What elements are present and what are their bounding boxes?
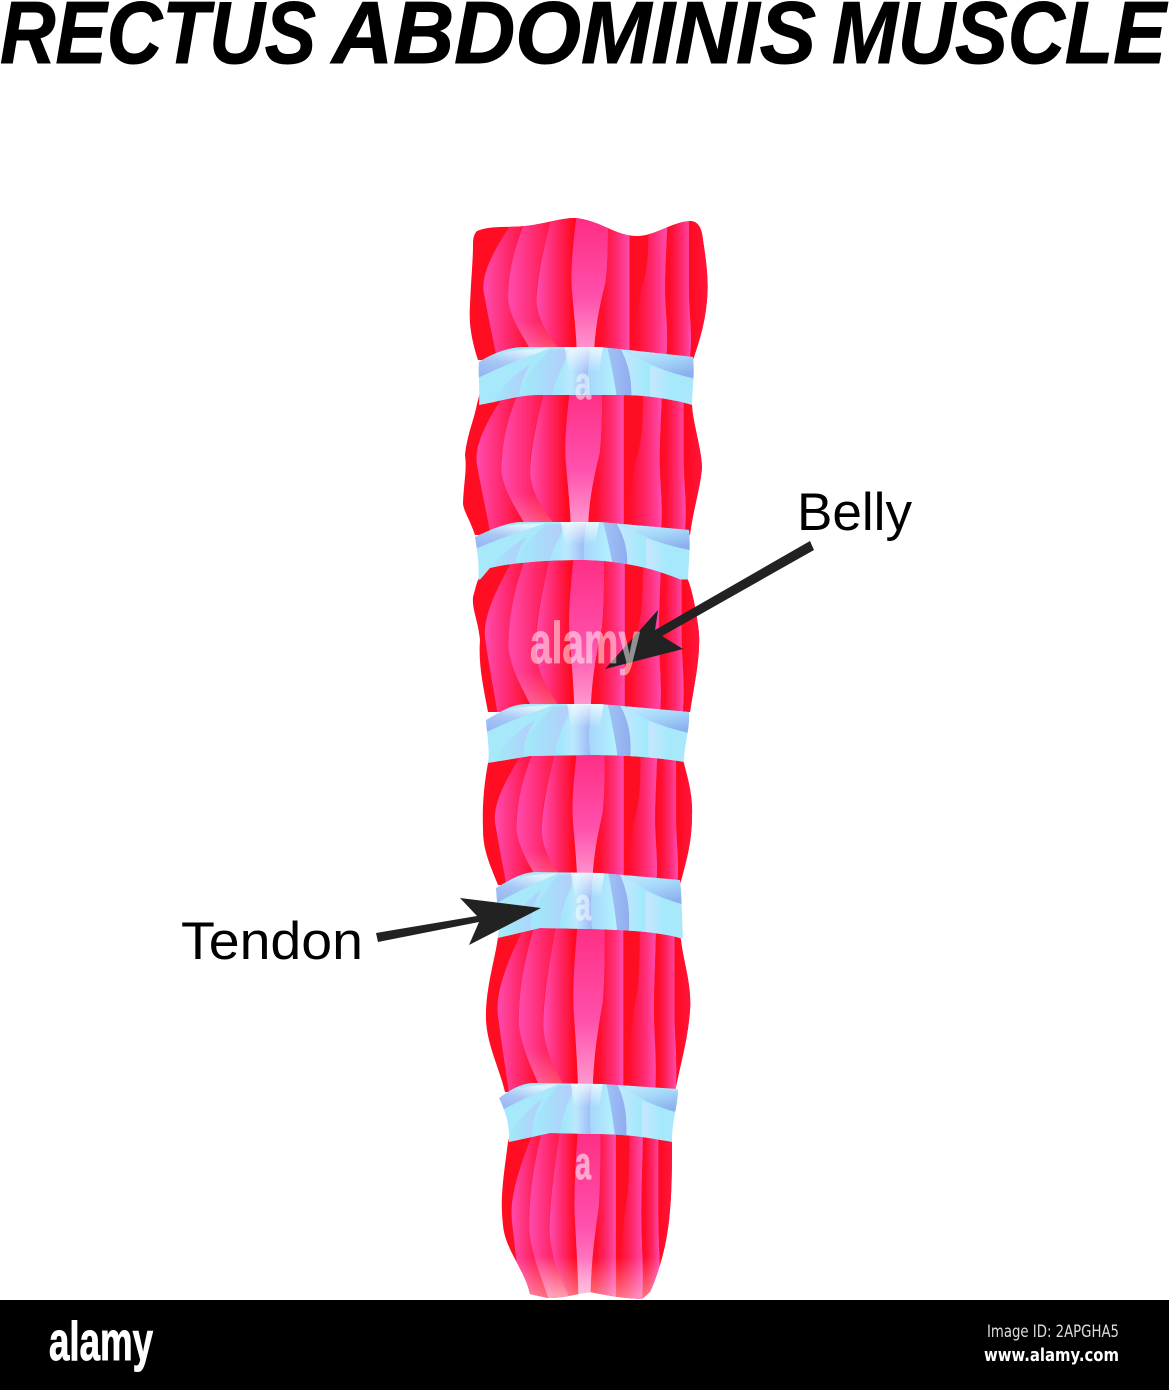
watermark [530,357,640,1189]
tendon band 2 [475,522,690,580]
title [0,0,1168,82]
watermark: a [575,1137,591,1189]
label: Belly: Belly [797,483,912,542]
muscle belly 3 [472,560,700,712]
watermark: a [575,878,591,930]
arrow: pointing to tendon [376,898,541,945]
muscle belly 2 [463,394,702,535]
tendon band 5 [499,1083,678,1142]
muscle belly 1 [470,218,708,360]
footer bar [0,1300,1169,1390]
muscle belly 4 [482,755,692,885]
watermark: alamy [530,611,640,676]
arrow: pointing to belly [605,541,814,669]
muscle belly 6 [502,1133,672,1299]
footer logo: alamy [49,1310,153,1372]
watermark: a [575,357,591,409]
muscle belly 5 [486,928,690,1092]
muscle column [463,218,708,1299]
tendon band 4 [496,872,683,939]
label: Tendon: Tendon [181,912,363,971]
tendon band 3 [486,704,690,763]
tendon band 1 [478,347,694,405]
website: www.alamy.com [984,1345,1119,1366]
image id: Image ID: 2APGHA5 [987,1322,1119,1342]
